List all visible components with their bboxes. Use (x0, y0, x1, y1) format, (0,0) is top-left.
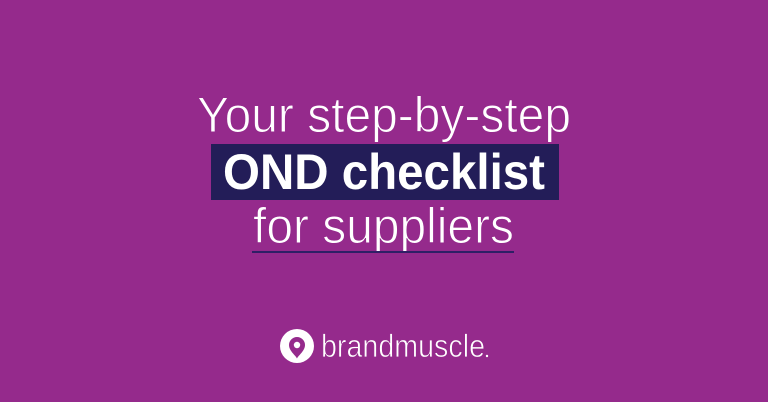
underline (252, 251, 514, 253)
logo (280, 328, 488, 364)
heading line: Your step-by-step: Your step-by-step (197, 87, 571, 143)
wordmark: brandmuscle: brandmuscle (321, 328, 485, 364)
wordmark dot (486, 355, 488, 357)
icon: location pin (280, 329, 314, 363)
heading line: for suppliers: for suppliers (253, 198, 514, 254)
highlighted heading: OND checklist: OND checklist (223, 144, 545, 200)
